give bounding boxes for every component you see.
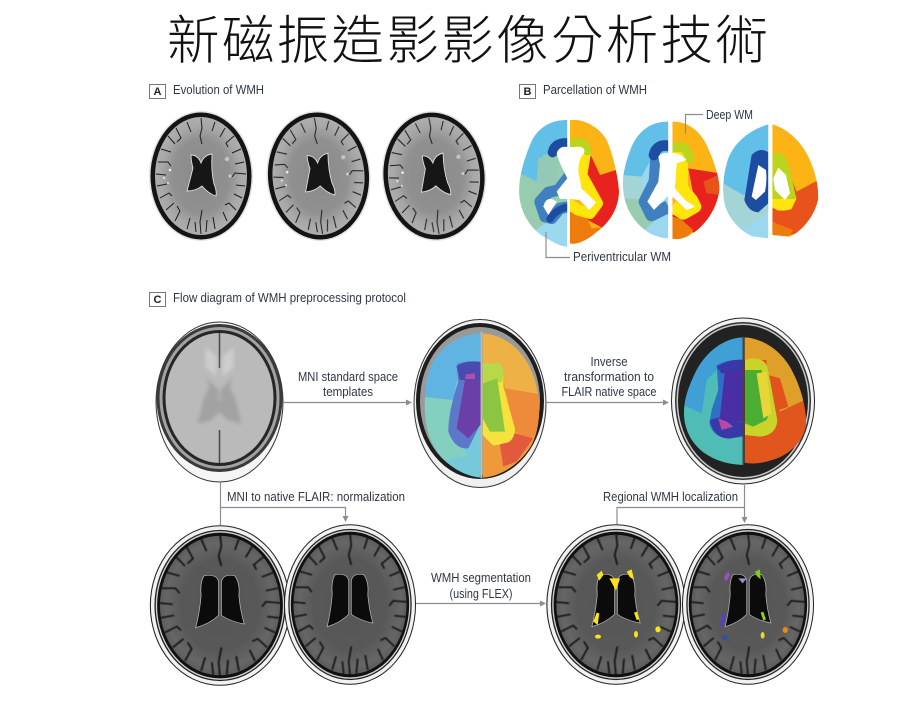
panel A: evolution of WMH bbox=[149, 83, 491, 245]
arrow: inverse transformation bbox=[546, 355, 669, 406]
parcellation map B2 bbox=[620, 118, 722, 242]
brain slice A1 bbox=[149, 111, 253, 241]
label: Deep WM: Deep WM bbox=[706, 108, 753, 122]
panel C heading: C bbox=[154, 294, 162, 306]
arrow: MNI to native FLAIR normalization bbox=[220, 482, 405, 525]
arrow: inverse transformation: FLAIR native space bbox=[562, 385, 657, 399]
arrow: regional WMH localization: Regional WMH localization bbox=[603, 490, 738, 504]
arrow: inverse transformation: transformation to bbox=[564, 370, 654, 384]
label: Periventricular WM: Periventricular WM bbox=[573, 250, 671, 264]
arrow: WMH segmentation: (using FLEX) bbox=[450, 587, 512, 601]
panel B heading: Parcellation of WMH bbox=[543, 83, 647, 97]
label: Periventricular WM bbox=[546, 232, 671, 264]
panel B heading bbox=[520, 83, 647, 98]
arrow: regional WMH localization bbox=[603, 485, 748, 524]
label: Deep WM bbox=[686, 108, 753, 134]
panel C: flow diagram bbox=[150, 291, 815, 686]
parcellation map B1 bbox=[519, 120, 619, 246]
FLAIR brain 1 bbox=[150, 525, 290, 686]
title: 新磁振造影影像分析技術 bbox=[167, 12, 768, 70]
atlas in native FLAIR space bbox=[671, 318, 815, 484]
arrow: WMH segmentation: WMH segmentation bbox=[431, 571, 531, 585]
panel A heading: A bbox=[154, 86, 162, 98]
brain slice A3 bbox=[377, 107, 491, 245]
panel B: parcellation of WMH bbox=[510, 83, 820, 264]
FLAIR brain 2 bbox=[284, 524, 416, 685]
arrow: WMH segmentation bbox=[416, 571, 546, 606]
panel C heading: Flow diagram of WMH preprocessing protocol bbox=[173, 291, 406, 305]
atlas overlay on template brain bbox=[414, 319, 546, 488]
brain slice A2 bbox=[262, 108, 375, 244]
FLAIR brain with regional WMH labels bbox=[682, 524, 814, 685]
arrow: MNI standard space templates: MNI standard space bbox=[298, 370, 398, 384]
FLAIR brain with segmentation mask bbox=[546, 524, 686, 685]
MNI template brain bbox=[156, 322, 284, 482]
arrow: MNI standard space templates bbox=[283, 370, 412, 406]
arrow: MNI to native FLAIR normalization: MNI to native FLAIR: normalization bbox=[227, 490, 405, 504]
arrow: inverse transformation: Inverse bbox=[590, 355, 628, 369]
parcellation map B3 bbox=[720, 122, 820, 240]
arrow: MNI standard space templates: templates bbox=[323, 385, 373, 399]
panel B heading: B bbox=[524, 86, 532, 98]
panel A heading: Evolution of WMH bbox=[173, 83, 264, 97]
panel A heading bbox=[150, 83, 264, 98]
